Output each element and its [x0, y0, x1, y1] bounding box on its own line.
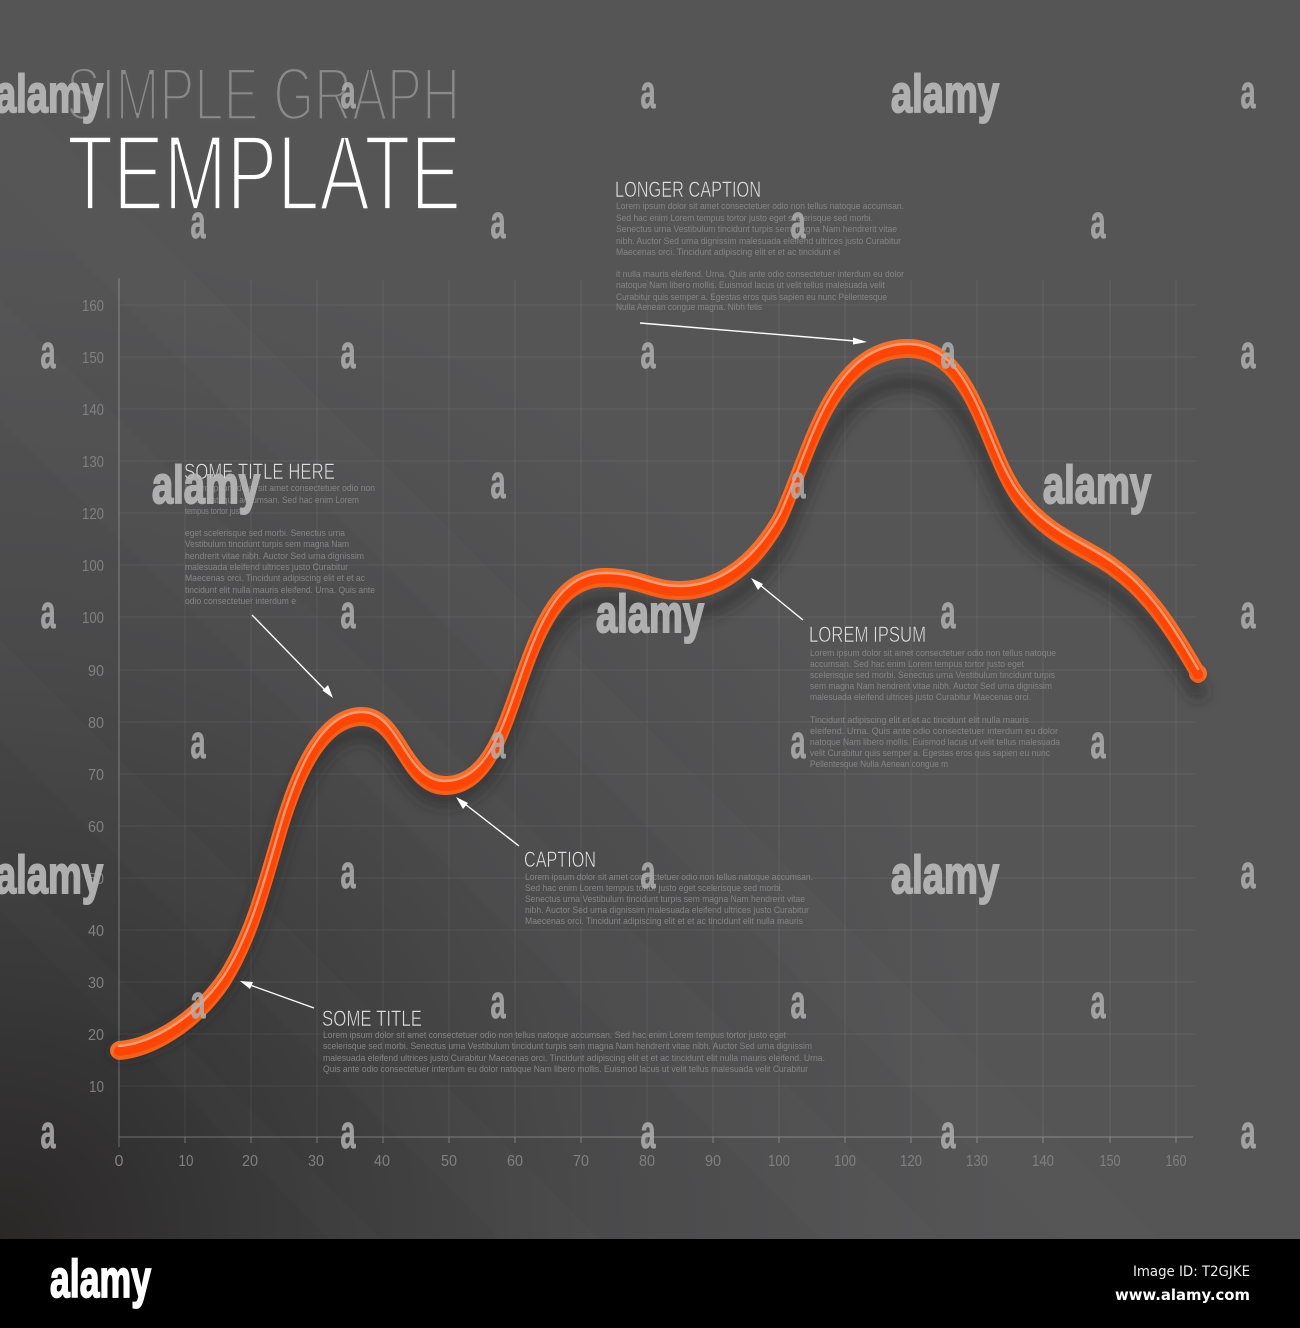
y axis labels: 50: [88, 871, 104, 888]
x axis labels: [114, 1153, 1187, 1170]
x axis labels: 100: [768, 1153, 790, 1170]
watermarks: a: [940, 585, 956, 638]
x axis labels: 0: [114, 1153, 124, 1170]
callout body: malesuada eleifend ultrices justo Curabitur Maecenas orci. Tincidunt adipiscing elit et et ac tincidunt elit nulla mauris eleifend. Urna.: [323, 1053, 825, 1064]
callout body: tincidunt elit nulla mauris eleifend. Urna. Quis ante: [185, 585, 375, 596]
watermarks: a: [1240, 585, 1256, 638]
watermarks: a: [640, 845, 656, 898]
watermarks: a: [640, 1105, 656, 1158]
x axis labels: 150: [1100, 1153, 1121, 1170]
chart grid and axes: [119, 278, 1196, 1147]
title: [66, 52, 461, 233]
watermarks: a: [490, 195, 506, 248]
y axis labels: 140: [82, 402, 104, 419]
watermarks: a: [790, 715, 806, 768]
watermarks: alamy: [152, 456, 260, 515]
x axis labels: 90: [705, 1153, 721, 1170]
callout body: [616, 201, 904, 313]
website: www.alamy.com: [1115, 1286, 1250, 1304]
watermarks: a: [790, 455, 806, 508]
x axis labels: 130: [966, 1153, 988, 1170]
callout body: nibh. Auctor Sed urna dignissim malesuada eleifend ultrices justo Curabitur: [525, 905, 809, 916]
watermarks: a: [940, 1105, 956, 1158]
watermarks: alamy: [891, 846, 999, 905]
y axis labels: 80: [88, 715, 104, 732]
callout body: nibh. Auctor Sed urna dignissim malesuada eleifend ultrices justo Curabitur: [616, 236, 901, 247]
y axis labels: 100: [82, 610, 104, 627]
callout body: Lorem ipsum dolor sit amet consectetuer odio non: [185, 483, 375, 494]
callout body: velit Curabitur quis semper a. Egestas eros quis sapien eu nunc: [810, 748, 1050, 759]
arrow: longer caption: [640, 323, 867, 344]
callout body: Lorem ipsum dolor sit amet consectetuer odio non tellus natoque: [810, 648, 1056, 659]
x axis labels: 120: [900, 1153, 922, 1170]
callout body: Vestibulum tincidunt turpis sem magna Nam: [185, 539, 349, 550]
callout heading: LONGER CAPTION: [615, 177, 761, 202]
watermarks: a: [1090, 975, 1106, 1028]
callout body: scelerisque sed morbi. Senectus urna Vestibulum tincidunt turpis: [810, 670, 1055, 681]
callout: some title here: [184, 459, 375, 607]
watermarks: a: [790, 975, 806, 1028]
callout body: Sed hac enim Lorem tempus tortor justo eget scelerisque sed morbi.: [525, 883, 783, 894]
watermarks: a: [1240, 1105, 1256, 1158]
watermarks: a: [940, 325, 956, 378]
callout body: Lorem ipsum dolor sit amet consectetuer odio non tellus natoque accumsan. Sed hac enim Lorem tempus tortor justo eget: [323, 1030, 786, 1041]
callout body: odio consectetuer interdum e: [185, 596, 296, 607]
callout heading: SOME TITLE HERE: [184, 459, 335, 484]
callout body: it nulla mauris eleifend. Urna. Quis ante odio consectetuer interdum eu dolor: [616, 269, 904, 280]
callout body: Nulla Aenean congue magna. Nibh felis: [616, 302, 762, 313]
callout body: malesuada eleifend ultrices justo Curabitur Maecenas orci.: [810, 692, 1031, 703]
callout body: Curabitur quis semper a. Egestas eros quis sapien eu nunc Pellentesque: [616, 292, 887, 303]
y axis labels: 10: [89, 1079, 104, 1096]
watermarks: a: [1240, 325, 1256, 378]
callout heading: SOME TITLE: [322, 1006, 422, 1031]
callout body: sem magna Nam hendrerit vitae nibh. Auctor Sed urna dignissim: [810, 681, 1052, 692]
image id: Image ID: T2GJKE: [1133, 1264, 1250, 1280]
callout body: Sed hac enim Lorem tempus tortor justo eget scelerisque sed morbi.: [616, 213, 873, 224]
callout body: [185, 483, 375, 607]
y axis labels: 160: [82, 298, 104, 315]
callout body: scelerisque sed morbi. Senectus urna Vestibulum tincidunt turpis sem magna Nam hendrerit vitae nibh. Auctor Sed urna dignissim: [323, 1041, 812, 1052]
callout body: Maecenas orci. Tincidunt adipiscing elit et et ac tincidunt el: [616, 247, 840, 258]
watermarks: a: [640, 65, 656, 118]
callout body: natoque Nam libero mollis. Euismod lacus ut velit tellus malesuada: [810, 737, 1061, 748]
callout body: Senectus urna Vestibulum tincidunt turpis sem magna Nam hendrerit vitae: [525, 894, 805, 905]
watermarks: alamy: [596, 585, 704, 644]
y axis labels: 20: [88, 1027, 104, 1044]
x axis labels: 140: [1032, 1153, 1054, 1170]
callout: lorem ipsum: [809, 622, 1061, 770]
watermarks: a: [640, 325, 656, 378]
y axis labels: [82, 298, 104, 1096]
callout body: Pellentesque Nulla Aenean congue m: [810, 759, 948, 770]
curve shadow: [119, 383, 1198, 1051]
callout body: [525, 872, 813, 927]
watermarks: a: [190, 975, 206, 1028]
callout body: tempus tortor justo: [185, 506, 245, 517]
title line 1: SIMPLE GRAPH: [66, 52, 460, 136]
x axis labels: 10: [178, 1153, 194, 1170]
watermarks: alamy: [891, 65, 999, 124]
y axis labels: 100: [82, 558, 104, 575]
watermarks: a: [1240, 65, 1256, 118]
watermarks: a: [1240, 845, 1256, 898]
callout: longer caption: [615, 177, 904, 313]
callout body: Maecenas orci. Tincidunt adipiscing elit et et ac tincidunt elit nulla mauris: [525, 916, 803, 927]
callout body: Lorem ipsum dolor sit amet consectetuer odio non tellus natoque accumsan.: [525, 872, 813, 883]
x axis labels: 30: [308, 1153, 324, 1170]
watermarks: a: [1090, 195, 1106, 248]
y axis labels: 30: [88, 975, 104, 992]
watermarks: a: [190, 195, 206, 248]
x axis labels: 40: [374, 1153, 390, 1170]
callout body: natoque Nam libero mollis. Euismod lacus ut velit tellus malesuada velit: [616, 280, 885, 291]
callout body: Quis ante odio consectetuer interdum eu dolor natoque Nam libero mollis. Euismod lacus ut velit tellus malesuada velit Curabitur: [323, 1064, 808, 1075]
footer logo: alamy: [50, 1250, 151, 1309]
watermarks: a: [340, 65, 356, 118]
x axis labels: 20: [242, 1153, 258, 1170]
arrow: caption: [456, 797, 519, 846]
watermarks: a: [340, 325, 356, 378]
callout body: [810, 648, 1061, 770]
footer bar: [0, 1239, 1300, 1328]
arrow: some title here: [252, 615, 333, 698]
watermarks: alamy: [1043, 456, 1151, 515]
y axis labels: 40: [88, 923, 104, 940]
x axis labels: 100: [834, 1153, 856, 1170]
watermarks: a: [490, 455, 506, 508]
y axis labels: 60: [88, 819, 104, 836]
callout body: eleifend. Urna. Quis ante odio consectetuer interdum eu dolor: [810, 726, 1058, 737]
orange line curve: [110, 344, 1207, 1060]
x axis labels: 80: [639, 1153, 655, 1170]
watermarks: a: [340, 1105, 356, 1158]
callout body: Senectus urna Vestibulum tincidunt turpis sem magna Nam hendrerit vitae: [616, 224, 897, 235]
watermarks: a: [1090, 715, 1106, 768]
callout body: Maecenas orci. Tincidunt adipiscing elit et et ac: [185, 573, 365, 584]
title line 2: TEMPLATE: [67, 112, 461, 233]
callout heading: CAPTION: [524, 847, 596, 872]
callout body: hendrerit vitae nibh. Auctor Sed urna dignissim: [185, 551, 364, 562]
callout body: [323, 1030, 825, 1075]
arrows: [240, 323, 867, 1008]
watermarks: a: [190, 715, 206, 768]
callout: caption: [524, 847, 813, 927]
x axis labels: 60: [507, 1153, 523, 1170]
watermarks: a: [490, 715, 506, 768]
x axis labels: 70: [573, 1153, 589, 1170]
callout body: eget scelerisque sed morbi. Senectus urna: [185, 528, 346, 539]
arrow: some title: [240, 981, 314, 1008]
watermarks: a: [40, 585, 56, 638]
watermarks: a: [40, 1105, 56, 1158]
y axis labels: 120: [82, 506, 104, 523]
callout heading: LOREM IPSUM: [809, 622, 926, 647]
y axis labels: 70: [88, 767, 104, 784]
callout body: tellus natoque accumsan. Sed hac enim Lorem: [185, 495, 359, 506]
callout body: accumsan. Sed hac enim Lorem tempus tortor justo eget: [810, 659, 1024, 670]
watermarks: a: [490, 975, 506, 1028]
watermarks: a: [40, 325, 56, 378]
callout body: malesuada eleifend ultrices justo Curabitur: [185, 562, 348, 573]
x axis labels: 160: [1166, 1153, 1187, 1170]
y axis labels: 90: [88, 663, 104, 680]
y axis labels: 130: [82, 454, 104, 471]
arrow: lorem ipsum: [751, 578, 803, 620]
watermarks: a: [790, 195, 806, 248]
y axis labels: 150: [82, 350, 104, 367]
watermarks: a: [340, 585, 356, 638]
watermarks: a: [340, 845, 356, 898]
watermarks: [0, 65, 1256, 1158]
x axis labels: 50: [441, 1153, 457, 1170]
callout: some title: [322, 1006, 825, 1075]
callout body: Tincidunt adipiscing elit et et ac tincidunt elit nulla mauris: [810, 715, 1029, 726]
callout body: Lorem ipsum dolor sit amet consectetuer odio non tellus natoque accumsan.: [616, 201, 904, 212]
